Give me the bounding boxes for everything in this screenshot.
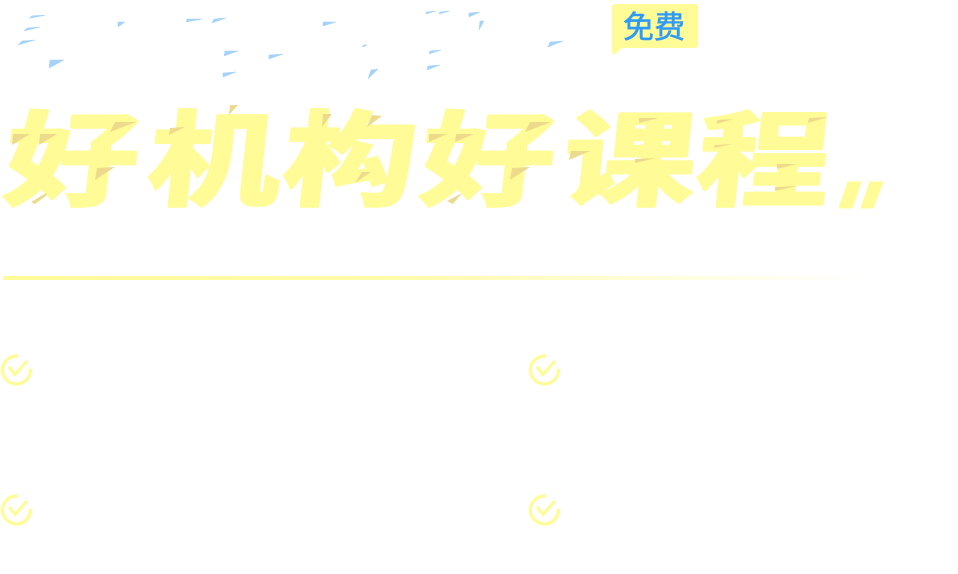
title: 好 <box>416 105 560 219</box>
title <box>0 105 836 219</box>
check icon: bottom right <box>531 496 558 524</box>
check icon: bottom left <box>3 496 31 524</box>
title: 好 <box>0 105 144 219</box>
decorative blue triangles <box>18 11 563 79</box>
title: 构 <box>278 105 422 219</box>
title fold shadows <box>12 105 828 204</box>
check icon: top left <box>3 356 31 384</box>
divider line <box>3 276 870 280</box>
badge: free <box>612 4 698 54</box>
title: 程 <box>692 105 836 219</box>
title closing marks <box>839 182 883 208</box>
title: 课 <box>558 105 702 219</box>
title: 机 <box>143 105 287 219</box>
badge: free: 免费 <box>623 10 685 45</box>
check icon: top right <box>531 356 558 384</box>
